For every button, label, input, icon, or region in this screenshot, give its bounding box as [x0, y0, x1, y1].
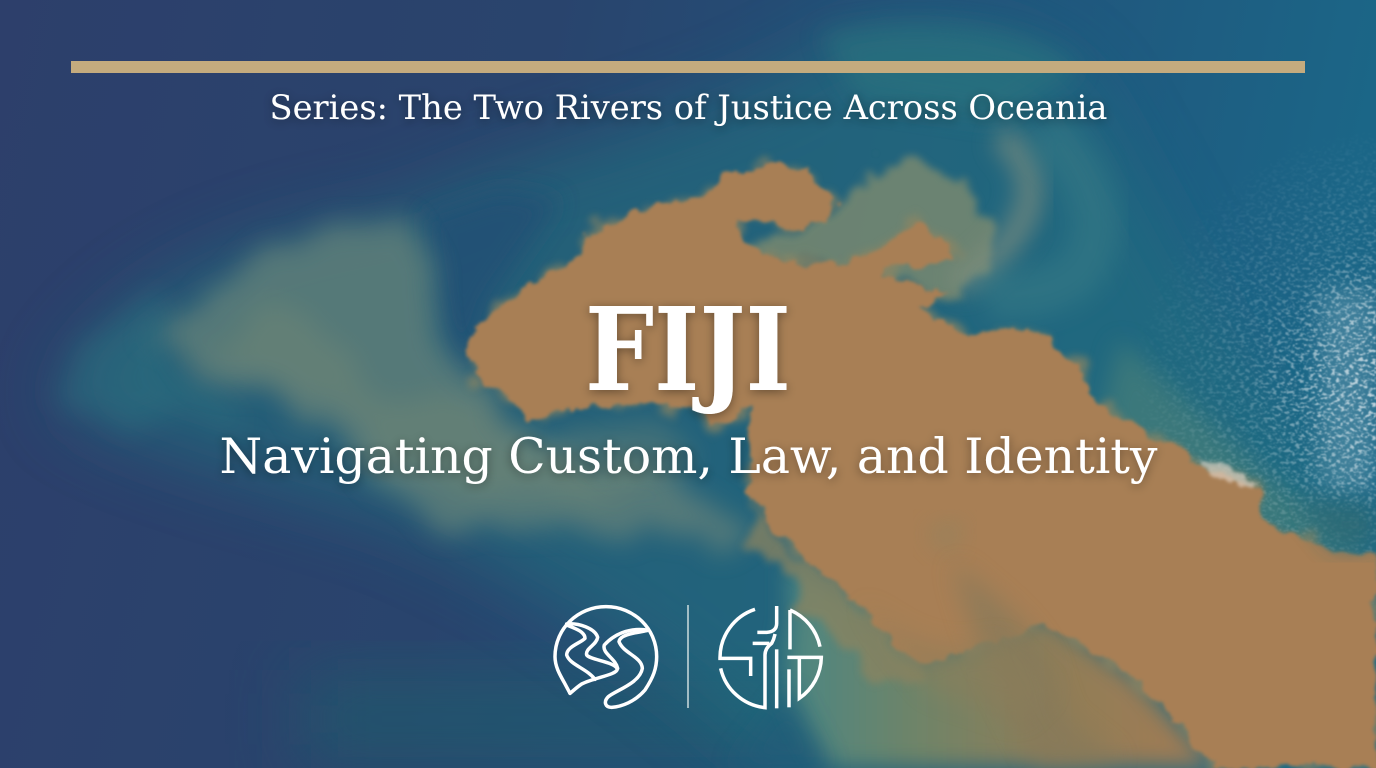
dark water pocket [425, 190, 560, 385]
turquoise inlet at the shoreline [1295, 500, 1376, 548]
series heading: Series: The Two Rivers of Justice Across Oceania [270, 88, 1108, 128]
icon: two-streams justice circle [720, 606, 821, 708]
subtitle: Navigating Custom, Law, and Identity [220, 428, 1158, 485]
sun glitter [1320, 290, 1376, 490]
upper grey-green swirl [745, 164, 990, 300]
icon: two rivers circle [555, 607, 657, 707]
left sediment plume [150, 212, 750, 542]
top gold rule [71, 61, 1305, 73]
lower olive plume [786, 560, 1218, 768]
logo group [555, 605, 821, 708]
teal shade at lower centre [300, 670, 940, 768]
foam at the shoreline [1197, 460, 1262, 486]
divider [687, 605, 689, 708]
main title: FIJI [585, 283, 791, 418]
main brown sediment [469, 162, 1376, 768]
olive streaks in the sediment [954, 562, 1120, 768]
deep water at bottom [730, 690, 830, 768]
